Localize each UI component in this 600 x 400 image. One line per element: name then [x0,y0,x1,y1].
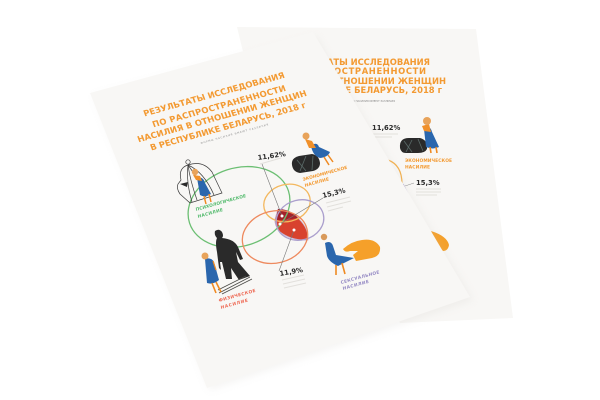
back sheet [237,27,513,323]
stat 15,3% [322,186,351,211]
icon: hand and woman [321,234,380,275]
back sheet title: ПО РАСПРОСТРАНЕННОСТИ [280,66,426,76]
back stat 11,62%: 11,62% [372,124,400,132]
label: sexual violence: НАСИЛИЕ [342,279,369,292]
circle: economic [260,179,314,227]
title: НАСИЛИЯ В ОТНОШЕНИИ ЖЕНЩИН [136,88,308,144]
icon: purse and woman [292,132,333,173]
back stat 11,62% [372,124,400,137]
back sheet title [271,57,446,95]
circle: physical [237,204,313,270]
back icon: hand [431,231,449,251]
back sheet title: В РЕСПУБЛИКЕ БЕЛАРУСЬ, 2018 г [277,85,443,95]
title: ПО РАСПРОСТРАНЕННОСТИ [151,83,287,129]
back sheet subtitle: ФОРМЫ НАСИЛИЯ ИМЕЮТ РАЗЛИЧИЯ [344,99,395,103]
stat 11,9% [279,266,306,288]
title [136,70,308,152]
label: physical violence: НАСИЛИЕ [220,298,248,311]
back stat 15,3% [405,179,441,195]
circle: psychological [177,154,301,260]
back stat 15,3%: 15,3% [416,179,440,187]
label: psychological violence: ПСИХОЛОГИЧЕСКОЕ [195,193,247,213]
label: sexual violence: СЕКСУАЛЬНОЕ [340,269,380,286]
back icon: purse and woman [400,117,439,153]
back sheet title: НАСИЛИЯ В ОТНОШЕНИИ ЖЕНЩИН [271,76,446,86]
front sheet shadow [94,36,473,390]
label: economic violence: НАСИЛИЕ [304,176,329,189]
label: economic violence: ЭКОНОМИЧЕСКОЕ [302,165,348,183]
label: psychological violence: НАСИЛИЕ [197,207,223,220]
title: В РЕСПУБЛИКЕ БЕЛАРУСЬ, 2018 г [149,100,308,152]
leader lines and dots [262,164,323,271]
label: sexual violence [340,269,380,292]
stat 15,3%: 15,3% [322,186,347,200]
label: physical violence: ФИЗИЧЕСКОЕ [218,288,256,304]
red overlap region [275,209,308,240]
venn diagram [177,154,328,270]
back label: economic violence: ЭКОНОМИЧЕСКОЕ [405,158,452,164]
stat 11,9%: 11,9% [279,266,304,278]
circle: sexual [272,195,328,245]
back circles arc [388,160,402,184]
stat 11,62%: 11,62% [257,150,287,162]
title: РЕЗУЛЬТАТЫ ИССЛЕДОВАНИЯ [142,70,286,118]
label: psychological violence [195,193,247,220]
label: physical violence [218,288,256,311]
icon: man and woman [202,230,252,294]
front sheet [90,32,470,388]
subtitle: ФОРМЫ НАСИЛИЯ ИМЕЮТ РАЗЛИЧИЯ [200,122,269,145]
back label: economic violence [405,158,452,170]
back sheet title: РЕЗУЛЬТАТЫ ИССЛЕДОВАНИЯ [284,57,430,67]
back label: economic violence: НАСИЛИЕ [405,164,430,170]
icon: caged woman [177,160,222,204]
